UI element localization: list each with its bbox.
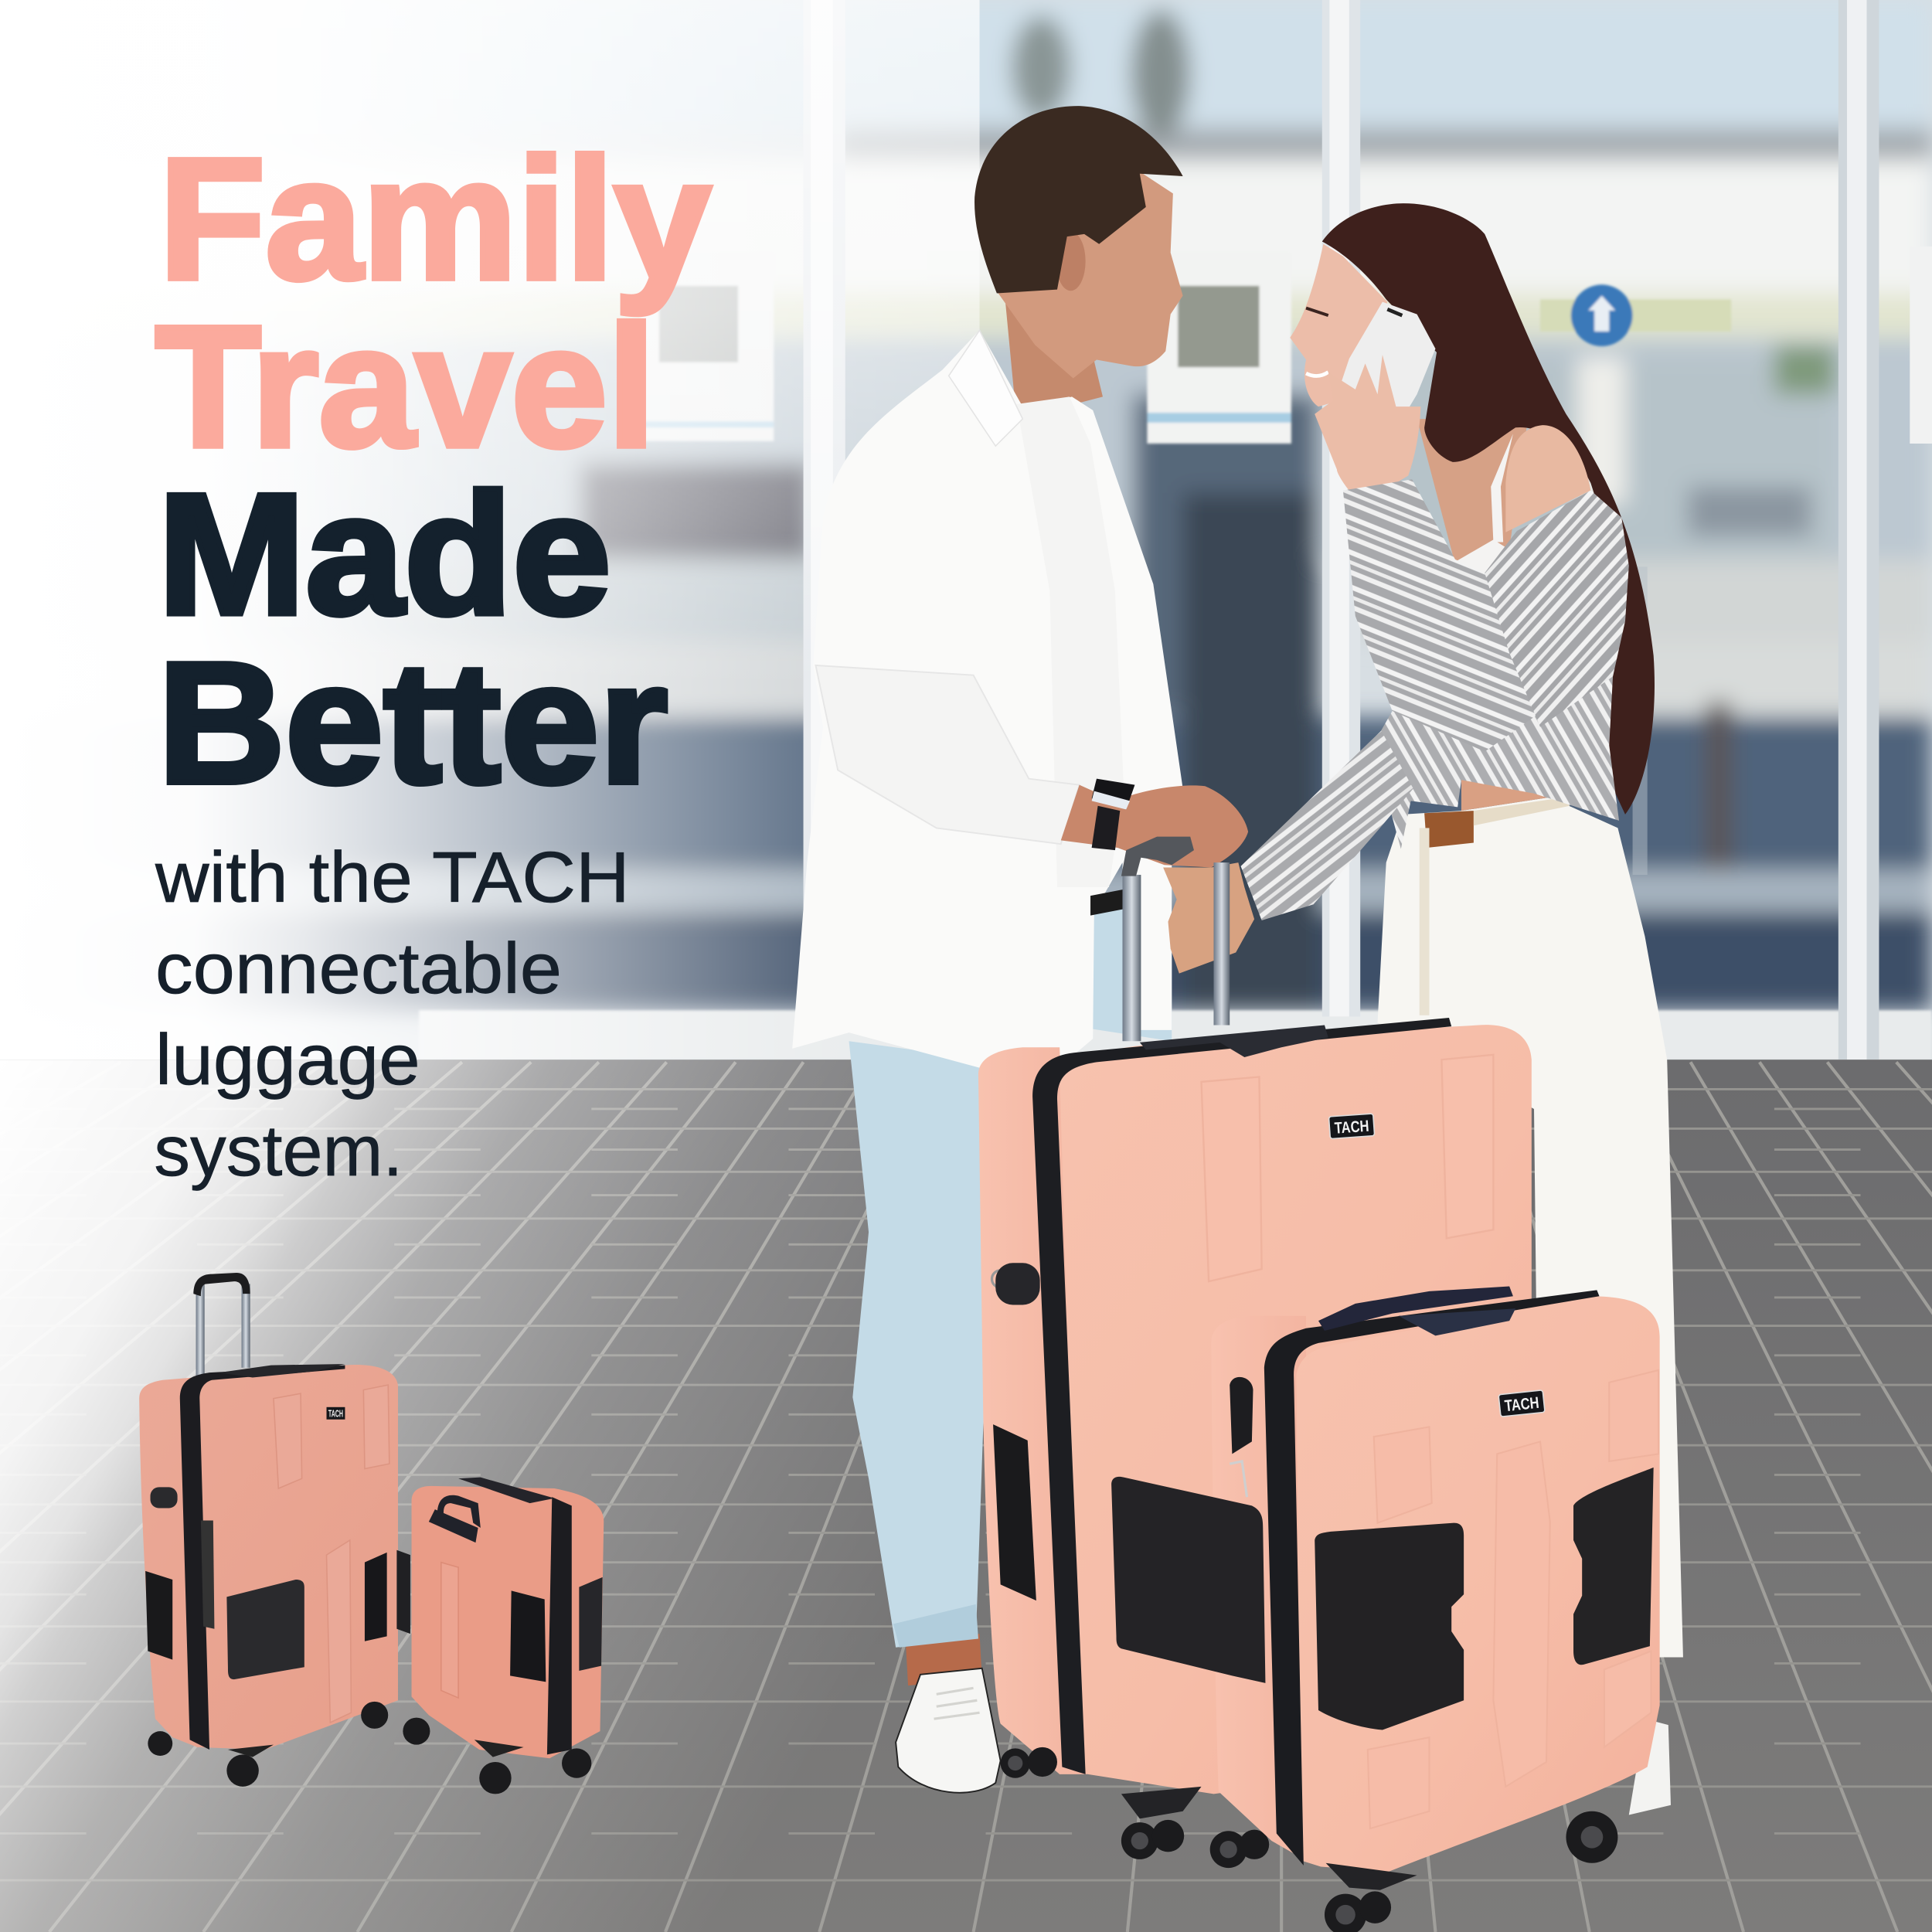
woman sleeve [1241, 730, 1413, 920]
woman face [1290, 244, 1387, 406]
panels [510, 1577, 603, 1682]
wheels [148, 1702, 388, 1787]
man jeans [849, 897, 1172, 1648]
tag [992, 1263, 1040, 1304]
rear housing [1211, 1316, 1306, 1861]
telescopic handle [1121, 837, 1230, 1041]
clasped hands [1163, 862, 1254, 974]
wheel housing [228, 1745, 274, 1757]
woman right shirt fold [1485, 491, 1629, 727]
suitcase: large rose [978, 837, 1532, 1868]
icon: blue direction sign [1540, 284, 1731, 346]
heading line: Family: Family [159, 123, 711, 315]
badge [327, 1407, 345, 1420]
connector between suitcases [396, 1550, 410, 1634]
sign: QR poster left [641, 253, 774, 441]
wheels [1001, 1747, 1269, 1868]
woman dangling strap [1420, 828, 1429, 1015]
embossed details [1202, 1055, 1493, 1281]
badge: TACH [1334, 1117, 1369, 1138]
right panel [1573, 1468, 1654, 1665]
embossed details [274, 1385, 389, 1723]
heading line: Travel: Travel [155, 291, 655, 483]
woman belt [1424, 798, 1570, 848]
heading line: Made: Made [158, 458, 611, 651]
woman midriff [1461, 764, 1550, 811]
white fade overlay left [0, 0, 1355, 1932]
man watch [1092, 779, 1134, 850]
top handle [1318, 1287, 1515, 1335]
body [412, 1486, 604, 1758]
embossed detail [441, 1563, 458, 1698]
person: woman [1241, 203, 1683, 1815]
side grip [201, 1520, 214, 1629]
suitcase: product thumbnail large [139, 1273, 398, 1787]
woman phone [1326, 302, 1435, 429]
top strap [458, 1478, 554, 1503]
subheading line 4: system. [154, 1111, 403, 1191]
woman top strap [1455, 434, 1513, 591]
badge [1498, 1390, 1545, 1417]
front face [1060, 1025, 1532, 1794]
embossed details [1368, 1370, 1658, 1828]
woman shoe [1629, 1719, 1671, 1815]
wheel housing [1326, 1863, 1417, 1890]
suitcase: small rose [1111, 1287, 1660, 1932]
heading line: Better: Better [158, 627, 668, 819]
woman lower shirt [1372, 676, 1619, 849]
man shirt [792, 330, 1183, 1071]
woman hand [1315, 355, 1420, 504]
suitcase: product thumbnail small [403, 1478, 604, 1794]
woman shoulder [1505, 425, 1590, 532]
sign: right edge poster [1910, 247, 1932, 444]
front panel [1315, 1523, 1464, 1730]
wheel housing [474, 1740, 524, 1757]
subheading line 2: connectable [155, 928, 562, 1009]
side wall [978, 1047, 1087, 1774]
badge [1328, 1114, 1375, 1139]
zipper [1264, 1290, 1600, 1866]
woman left shirt fold [1343, 479, 1555, 752]
panels [145, 1553, 387, 1679]
body [139, 1365, 398, 1750]
top strap [219, 1364, 345, 1378]
wheels [1325, 1811, 1617, 1932]
zipper [547, 1497, 572, 1754]
zipper [1032, 1018, 1451, 1774]
man ear [1056, 232, 1086, 291]
brick pavement [0, 1060, 1932, 1932]
woman white trousers [1378, 798, 1683, 1657]
man jeans cuff [893, 1604, 978, 1648]
heading [155, 123, 711, 819]
woman hair [1322, 203, 1655, 815]
subheading line 3: luggage [155, 1019, 420, 1100]
woman neck and chest [1417, 419, 1528, 564]
tag [151, 1487, 178, 1509]
person: man [792, 106, 1254, 1793]
man sleeve [815, 665, 1080, 844]
wheel hubs [1335, 1826, 1603, 1924]
background: airport glass facade [0, 0, 1932, 1072]
badge: TACH [1504, 1394, 1540, 1415]
wheel hubs [1008, 1756, 1237, 1858]
man hair [975, 106, 1183, 293]
man forearm and hand [1061, 785, 1248, 867]
wheel housing [1121, 1787, 1202, 1818]
top handle [429, 1495, 481, 1543]
man head [995, 170, 1183, 378]
top strap [1140, 1026, 1328, 1057]
man shoe [896, 1668, 1001, 1793]
handle [193, 1273, 250, 1378]
left side panel [993, 1424, 1036, 1600]
man belt [1090, 889, 1122, 916]
badge: TACH [328, 1408, 343, 1420]
front face [1296, 1296, 1660, 1872]
subheading line 1: with the TACH [155, 837, 630, 917]
flip-out panel of large case [1111, 1477, 1265, 1683]
subheading [154, 837, 630, 1191]
sign: QR poster centre [1147, 253, 1291, 444]
man ankle [906, 1634, 982, 1685]
luggage clip [1230, 1377, 1253, 1497]
wheels [403, 1718, 591, 1794]
man neck [1004, 290, 1103, 419]
zipper [180, 1366, 345, 1750]
